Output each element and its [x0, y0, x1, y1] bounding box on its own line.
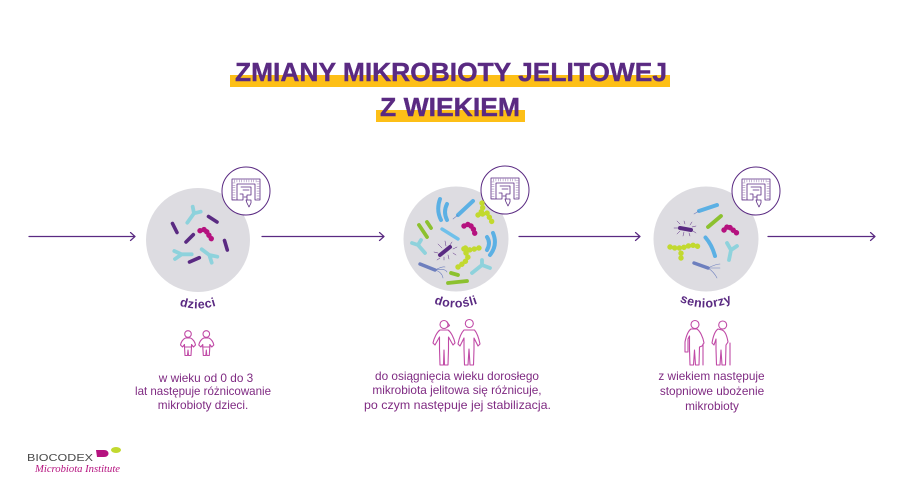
text: dorośli: do osiągnięcia wieku dorosłego [375, 369, 539, 383]
arrow 4 [768, 232, 875, 240]
icon: children [180, 331, 214, 356]
icon: adults [433, 320, 480, 365]
text: seniorzy: z wiekiem następuje [658, 369, 765, 383]
text: dorośli: mikrobiota jelitowa się różnicuje, [372, 383, 542, 397]
panel: seniorzy [654, 166, 780, 413]
logo: Biocodex Microbiota Institute: BIOCODEX [27, 452, 93, 464]
logo: Biocodex Microbiota Institute [27, 447, 121, 475]
arrow 1 [29, 232, 135, 240]
arrow 3 [519, 232, 640, 240]
label: seniorzy: seniorzy [680, 296, 730, 308]
title: Z WIEKIEM [380, 92, 520, 122]
title: ZMIANY MIKROBIOTY JELITOWEJ [235, 57, 667, 87]
text: dzieci: lat następuje różnicowanie [135, 384, 271, 398]
arrow 2 [262, 232, 384, 240]
text: dorośli: po czym następuje jej stabilizacja. [364, 398, 551, 412]
title [230, 57, 670, 122]
petri circle: seniorzy [654, 186, 758, 292]
text: seniorzy: stopniowe ubożenie [660, 384, 765, 398]
bacteria: seniorzy [670, 205, 738, 278]
icon: intestine, dorośli [481, 166, 529, 214]
icon: intestine, dzieci [222, 167, 270, 215]
panel: dorośli [364, 166, 551, 412]
bacteria: dorośli [412, 199, 495, 283]
text: seniorzy: mikrobioty [685, 399, 739, 413]
bacteria: dzieci [172, 207, 227, 263]
panel: dzieci [135, 166, 271, 412]
petri circle: dorośli [404, 186, 508, 292]
text: dzieci: w wieku od 0 do 3 [158, 371, 254, 385]
logo: Biocodex Microbiota Institute: Microbiota Institute [34, 463, 120, 475]
icon: intestine, seniorzy [732, 167, 780, 215]
petri circle: dzieci [146, 188, 250, 292]
icon: seniors [685, 320, 730, 365]
label: dzieci: dzieci [180, 297, 216, 308]
label: dorośli: dorośli [435, 295, 477, 308]
text: dzieci: mikrobioty dzieci. [158, 398, 248, 412]
